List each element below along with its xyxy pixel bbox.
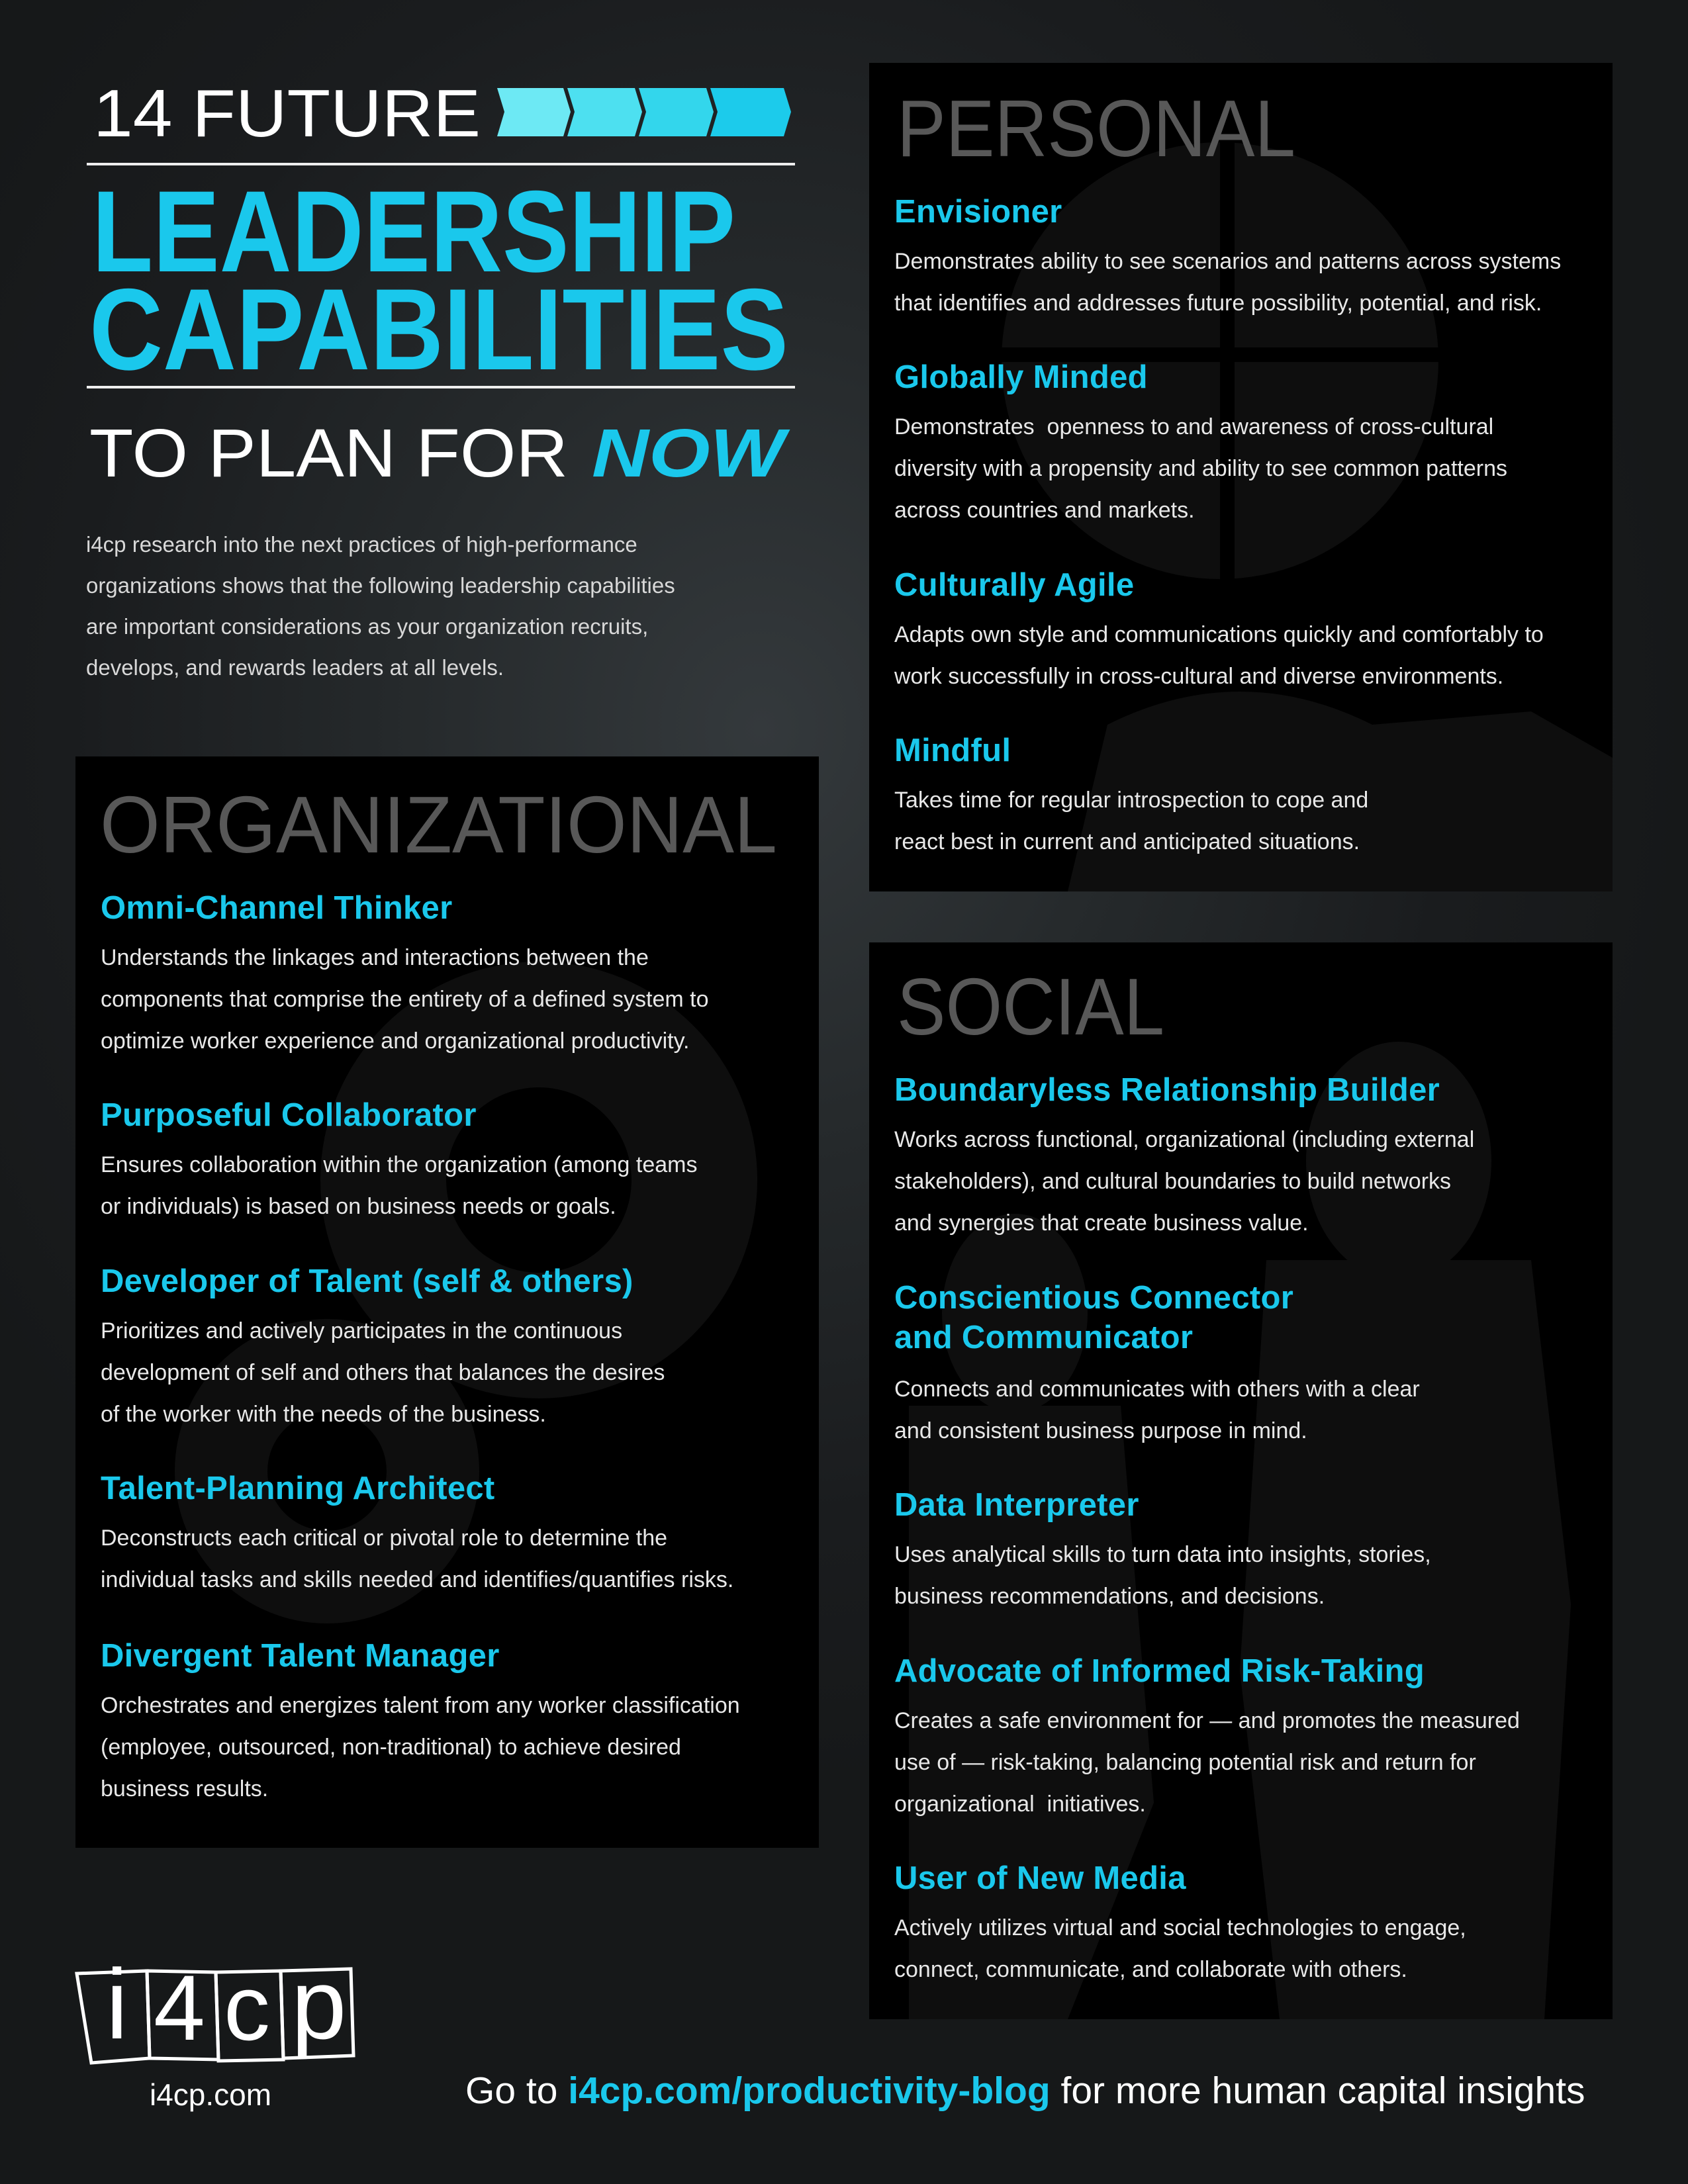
item: conscientious connector: and Communicator (894, 1320, 1193, 1355)
title (87, 79, 795, 490)
item: globally minded: Demonstrates openness to and awareness of cross-cultural (894, 414, 1493, 439)
item: user of new media: connect, communicate, and collaborate with others. (894, 1957, 1407, 1982)
footer call to action: Go to i4cp.com/productivity-blog for more human capital insights (465, 2070, 1585, 2112)
item: globally minded: diversity with a propensity and ability to see common patterns (894, 456, 1507, 481)
item: culturally agile (894, 567, 1544, 689)
item: purposeful collaborator: Purposeful Collaborator (101, 1097, 477, 1133)
item: globally minded: across countries and markets. (894, 498, 1195, 523)
item: user of new media: Actively utilizes virtual and social technologies to engage, (894, 1915, 1466, 1940)
item: developer of talent: Prioritizes and actively participates in the continuous (101, 1318, 622, 1343)
item: conscientious connector: Connects and communicates with others with a clear (894, 1377, 1420, 1402)
item: mindful: Mindful (894, 733, 1011, 768)
intro text: organizations shows that the following leadership capabilities (86, 573, 675, 598)
item: data interpreter (894, 1487, 1431, 1609)
heading: organizational: ORGANIZATIONAL (100, 780, 777, 870)
item: globally minded (894, 359, 1507, 523)
item: culturally agile: work successfully in cross-cultural and diverse environments. (894, 664, 1503, 689)
logo: i4cp: p (291, 1948, 346, 2060)
item: user of new media: User of New Media (894, 1860, 1186, 1896)
item: user of new media (894, 1860, 1466, 1982)
item: advocate of informed risk-taking: organizational initiatives. (894, 1792, 1146, 1817)
item: advocate of informed risk-taking: use of — risk-taking, balancing potential risk and return for (894, 1750, 1476, 1775)
intro text: develops, and rewards leaders at all levels. (86, 655, 504, 680)
item: developer of talent (101, 1263, 665, 1427)
item: developer of talent: of the worker with the needs of the business. (101, 1402, 546, 1427)
item: conscientious connector: and consistent business purpose in mind. (894, 1418, 1307, 1443)
item: conscientious connector: Conscientious Connector (894, 1280, 1293, 1316)
logo: i4cp: i (106, 1948, 128, 2060)
panel: social (869, 942, 1613, 2019)
title line: TO PLAN FOR NOW: TO PLAN FOR (89, 415, 568, 490)
item: globally minded: Globally Minded (894, 359, 1148, 395)
item: divergent talent manager: Divergent Talent Manager (101, 1638, 500, 1674)
item: purposeful collaborator (101, 1097, 698, 1219)
item: advocate of informed risk-taking: Creates a safe environment for — and promotes the measured (894, 1708, 1520, 1733)
item: culturally agile: Culturally Agile (894, 567, 1134, 603)
intro text (86, 532, 675, 680)
item: culturally agile: Adapts own style and communications quickly and comfortably to (894, 622, 1544, 647)
item: omni-channel thinker: Understands the linkages and interactions between the (101, 945, 649, 970)
item: data interpreter: Data Interpreter (894, 1487, 1139, 1523)
item: divergent talent manager (101, 1638, 740, 1801)
item: purposeful collaborator: Ensures collaboration within the organization (among teams (101, 1152, 698, 1177)
heading: social: SOCIAL (897, 962, 1164, 1052)
item: data interpreter: business recommendations, and decisions. (894, 1584, 1325, 1609)
item: omni-channel thinker: components that comprise the entirety of a defined system to (101, 987, 708, 1012)
item: boundaryless relationship builder: stakeholders), and cultural boundaries to build networks (894, 1169, 1451, 1194)
item: mindful: Takes time for regular introspection to cope and (894, 788, 1368, 813)
item: advocate of informed risk-taking: Advocate of Informed Risk-Taking (894, 1653, 1425, 1689)
item: omni-channel thinker: optimize worker experience and organizational productivity. (101, 1028, 690, 1054)
item: envisioner: that identifies and addresses future possibility, potential, and risk. (894, 291, 1542, 316)
item: boundaryless relationship builder: Boundaryless Relationship Builder (894, 1072, 1440, 1108)
panel: personal (869, 63, 1613, 891)
title line: TO PLAN FOR NOW: NOW (592, 415, 790, 490)
item: envisioner: Demonstrates ability to see scenarios and patterns across systems (894, 249, 1561, 274)
panel: organizational (75, 756, 819, 1848)
intro text: are important considerations as your organization recruits, (86, 614, 648, 639)
item: developer of talent: Developer of Talent (self & others) (101, 1263, 633, 1299)
intro text: i4cp research into the next practices of high-performance (86, 532, 637, 557)
icon: chevron arrows (497, 88, 791, 136)
item: mindful (894, 733, 1368, 854)
item: envisioner (894, 194, 1561, 316)
item: mindful: react best in current and anticipated situations. (894, 829, 1360, 854)
item: advocate of informed risk-taking (894, 1653, 1520, 1817)
title line: TO PLAN FOR NOW (89, 415, 790, 491)
logo: i4cp (75, 1948, 355, 2065)
item: divergent talent manager: Orchestrates and energizes talent from any worker classification (101, 1693, 740, 1718)
item: data interpreter: Uses analytical skills to turn data into insights, stories, (894, 1542, 1431, 1567)
item: developer of talent: development of self and others that balances the desires (101, 1360, 665, 1385)
logo: i4cp: 4 (154, 1956, 205, 2060)
item: omni-channel thinker: Omni-Channel Thinker (101, 890, 452, 926)
item: boundaryless relationship builder (894, 1072, 1474, 1236)
item: talent-planning architect (101, 1471, 733, 1592)
item: divergent talent manager: business results. (101, 1776, 268, 1801)
item: divergent talent manager: (employee, outsourced, non-traditional) to achieve desired (101, 1735, 681, 1760)
item: omni-channel thinker (101, 890, 708, 1054)
item: talent-planning architect: Deconstructs each critical or pivotal role to determine the (101, 1525, 667, 1551)
item: boundaryless relationship builder: Works across functional, organizational (including external (894, 1127, 1474, 1152)
heading: personal: PERSONAL (897, 83, 1295, 173)
item: boundaryless relationship builder: and synergies that create business value. (894, 1210, 1309, 1236)
item: envisioner: Envisioner (894, 194, 1062, 230)
logo url text: i4cp.com (150, 2077, 271, 2112)
item: talent-planning architect: Talent-Planning Architect (101, 1471, 495, 1506)
logo: i4cp: c (224, 1956, 270, 2060)
item: talent-planning architect: individual tasks and skills needed and identifies/quantifies risks. (101, 1567, 733, 1592)
item: purposeful collaborator: or individuals) is based on business needs or goals. (101, 1194, 616, 1219)
item: conscientious connector (894, 1280, 1420, 1443)
